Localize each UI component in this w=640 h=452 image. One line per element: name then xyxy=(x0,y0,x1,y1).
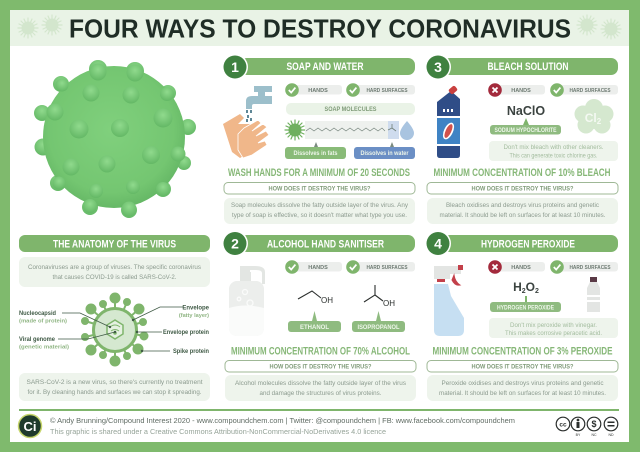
heading: anatomy xyxy=(19,235,210,252)
how box 3 xyxy=(427,182,618,194)
heading 4 xyxy=(425,230,618,256)
icons: header viruses xyxy=(18,15,621,39)
formula: H2O2: HYDROGEN PEROXIDE xyxy=(497,306,554,312)
text block 2 xyxy=(225,375,416,401)
licence icons: BY xyxy=(576,433,581,437)
pills: suitability: HANDS xyxy=(511,88,531,94)
how box 3: HOW DOES IT DESTROY THE VIRUS? xyxy=(472,186,574,192)
licence icons: ND xyxy=(608,433,614,437)
formula: NaClO: SODIUM HYPOCHLORITE xyxy=(494,128,556,134)
title band xyxy=(10,10,629,46)
note: bleach warning: This can generate toxic chlorine gas. xyxy=(510,152,598,160)
pills: suitability xyxy=(285,260,415,274)
text block: intro: Coronaviruses are a group of viruses. The specific coronavirus xyxy=(28,264,202,271)
heading 1 xyxy=(222,54,415,80)
pills: suitability xyxy=(285,83,415,97)
molecule: ethanol: ETHANOL xyxy=(300,325,329,331)
molecule: ethanol xyxy=(288,291,341,332)
virus diagram: Nucleocapsid xyxy=(19,311,56,317)
icon: chlorine cloud: 2 xyxy=(597,117,602,126)
heading 1: 1 xyxy=(231,59,239,75)
heading 2 xyxy=(222,230,415,256)
text block 4: material. It should be left on surfaces for at least 10 minutes. xyxy=(439,390,606,397)
icon: hands xyxy=(223,114,269,158)
how box 2: HOW DOES IT DESTROY THE VIRUS? xyxy=(270,364,372,370)
heading 4: HYDROGEN PEROXIDE xyxy=(481,238,575,250)
soap molecule diagram: Dissolves in fats xyxy=(294,151,338,157)
text block 1 xyxy=(224,198,415,224)
heading 1: SOAP AND WATER xyxy=(286,61,364,73)
note: bleach warning: Don't mix bleach with other cleaners. xyxy=(504,144,604,151)
licence icons: cc xyxy=(559,422,567,428)
icon: bleach bottle xyxy=(437,85,460,158)
formula: NaClO xyxy=(490,104,561,134)
licence icons: $ xyxy=(591,419,597,429)
text block 4 xyxy=(427,375,618,401)
icon: water drops xyxy=(246,110,252,122)
formula: H2O2: O xyxy=(526,280,535,294)
heading 4: 4 xyxy=(434,236,442,252)
icon: tap xyxy=(246,86,272,109)
formula: H2O2: 2 xyxy=(522,288,526,295)
text block 2: and damage the structures of virus proteins. xyxy=(260,390,382,397)
icon: chlorine cloud: Cl xyxy=(585,111,597,125)
how box 1 xyxy=(224,182,415,194)
text block 3: material. It should be left on surfaces for at least 10 minutes. xyxy=(440,212,606,219)
icon: spray bottle xyxy=(434,265,464,336)
panel: anatomy of the virus xyxy=(19,235,210,401)
heading 3: 3 xyxy=(434,59,442,75)
molecule: isopropanol: ISOPROPANOL xyxy=(358,325,400,331)
formula: NaClO: NaClO xyxy=(507,104,545,118)
footer credits: © Andy Brunning/Compound Interest 2020 - www.compoundchem.com | Twitter: @compoundchem | FB: www.facebook.com/compoundchem xyxy=(50,416,515,425)
heading: minimum alcohol: MINIMUM CONCENTRATION OF 70% ALCOHOL xyxy=(231,346,410,358)
coronavirus 3D ball illustration xyxy=(34,60,196,218)
pills: suitability: HANDS xyxy=(308,88,328,94)
text block: intro xyxy=(19,257,210,287)
molecule: isopropanol xyxy=(352,285,405,332)
icon: peroxide bottle xyxy=(587,277,600,312)
how box 2 xyxy=(225,360,416,372)
text block: treatment xyxy=(19,373,210,401)
panel 4: hydrogen peroxide xyxy=(425,230,618,401)
panel 2: alcohol hand sanitiser xyxy=(222,230,416,401)
soap molecule diagram: Dissolves in water xyxy=(360,151,409,157)
virus diagram: (genetic material) xyxy=(19,344,69,350)
pills: suitability xyxy=(488,260,618,274)
note: bleach warning xyxy=(489,141,618,161)
pills: suitability: HARD SURFACES xyxy=(570,265,611,271)
icon: sanitiser bottle xyxy=(229,266,265,336)
text block: treatment: for it. By cleaning hands and surfaces we can stop it spreading. xyxy=(28,389,202,396)
formula: H2O2 xyxy=(490,280,561,312)
pills: suitability xyxy=(488,83,618,97)
heading 3: BLEACH SOLUTION xyxy=(488,61,569,73)
text block 1: Soap molecules dissolve the fatty outside layer of the virus. Any xyxy=(231,202,409,209)
note: peroxide warning xyxy=(489,318,618,338)
virus diagram: Viral genome xyxy=(19,337,56,343)
panel 3: bleach solution xyxy=(425,54,618,224)
note: peroxide warning: This makes corrosive peracetic acid. xyxy=(505,330,602,337)
logo: compound interest: Ci xyxy=(24,419,36,434)
virus diagram: Spike protein xyxy=(173,349,209,355)
soap molecule diagram xyxy=(285,103,415,159)
how box 4: HOW DOES IT DESTROY THE VIRUS? xyxy=(472,364,574,370)
pills: suitability: HARD SURFACES xyxy=(366,88,408,94)
text block 1: type of soap is effective, so it doesn't matter what type you use. xyxy=(232,212,407,219)
title: FOUR WAYS TO DESTROY CORONAVIRUS xyxy=(69,14,571,44)
pills: suitability: HANDS xyxy=(308,265,328,271)
pills: suitability: HANDS xyxy=(511,265,531,271)
heading 3 xyxy=(425,54,618,80)
heading: anatomy: THE ANATOMY OF THE VIRUS xyxy=(53,238,176,250)
text block 3 xyxy=(427,198,618,224)
heading 2: ALCOHOL HAND SANITISER xyxy=(267,238,384,250)
formula: H2O2: H xyxy=(513,280,522,294)
molecule: ethanol: OH xyxy=(321,296,333,305)
virus diagram xyxy=(19,294,210,366)
soap molecule diagram: SOAP MOLECULES xyxy=(324,106,376,113)
text block 4: Peroxide oxidises and destroys virus proteins and genetic xyxy=(442,380,604,387)
footer licence: This graphic is shared under a Creative Commons Attribution-NonCommercial-NoDerivatives 4.0 licence xyxy=(50,427,386,436)
heading 2: 2 xyxy=(231,236,239,252)
heading: minimum time: WASH HANDS FOR A MINIMUM OF 20 SECONDS xyxy=(228,167,410,179)
virus diagram: Envelope protein xyxy=(163,330,209,336)
pills: suitability: HARD SURFACES xyxy=(570,88,611,94)
molecule: isopropanol: OH xyxy=(383,299,395,308)
note: peroxide warning: Don't mix peroxide with vinegar. xyxy=(510,322,597,329)
virus diagram: Envelope xyxy=(182,306,210,312)
text block 2: Alcohol molecules dissolve the fatty outside layer of the virus xyxy=(235,380,407,387)
text block: intro: that causes COVID-19 is called SARS-CoV-2. xyxy=(52,274,177,281)
licence icons: NC xyxy=(591,433,597,437)
how box 1: HOW DOES IT DESTROY THE VIRUS? xyxy=(268,186,371,192)
logo: compound interest xyxy=(18,414,42,438)
licence icons xyxy=(556,417,618,437)
footer xyxy=(18,409,619,438)
text block: treatment: SARS-CoV-2 is a new virus, so there's currently no treatment xyxy=(26,379,203,386)
virus diagram: (fatty layer) xyxy=(179,313,209,319)
icon: chlorine cloud xyxy=(574,99,614,134)
pills: suitability: HARD SURFACES xyxy=(366,265,408,271)
panel 1: soap and water xyxy=(222,54,415,224)
how box 4 xyxy=(427,360,618,372)
virus diagram: (made of protein) xyxy=(19,318,67,324)
formula: H2O2: 2 xyxy=(535,288,539,295)
text block 3: Bleach oxidises and destroys virus proteins and genetic xyxy=(446,202,600,209)
